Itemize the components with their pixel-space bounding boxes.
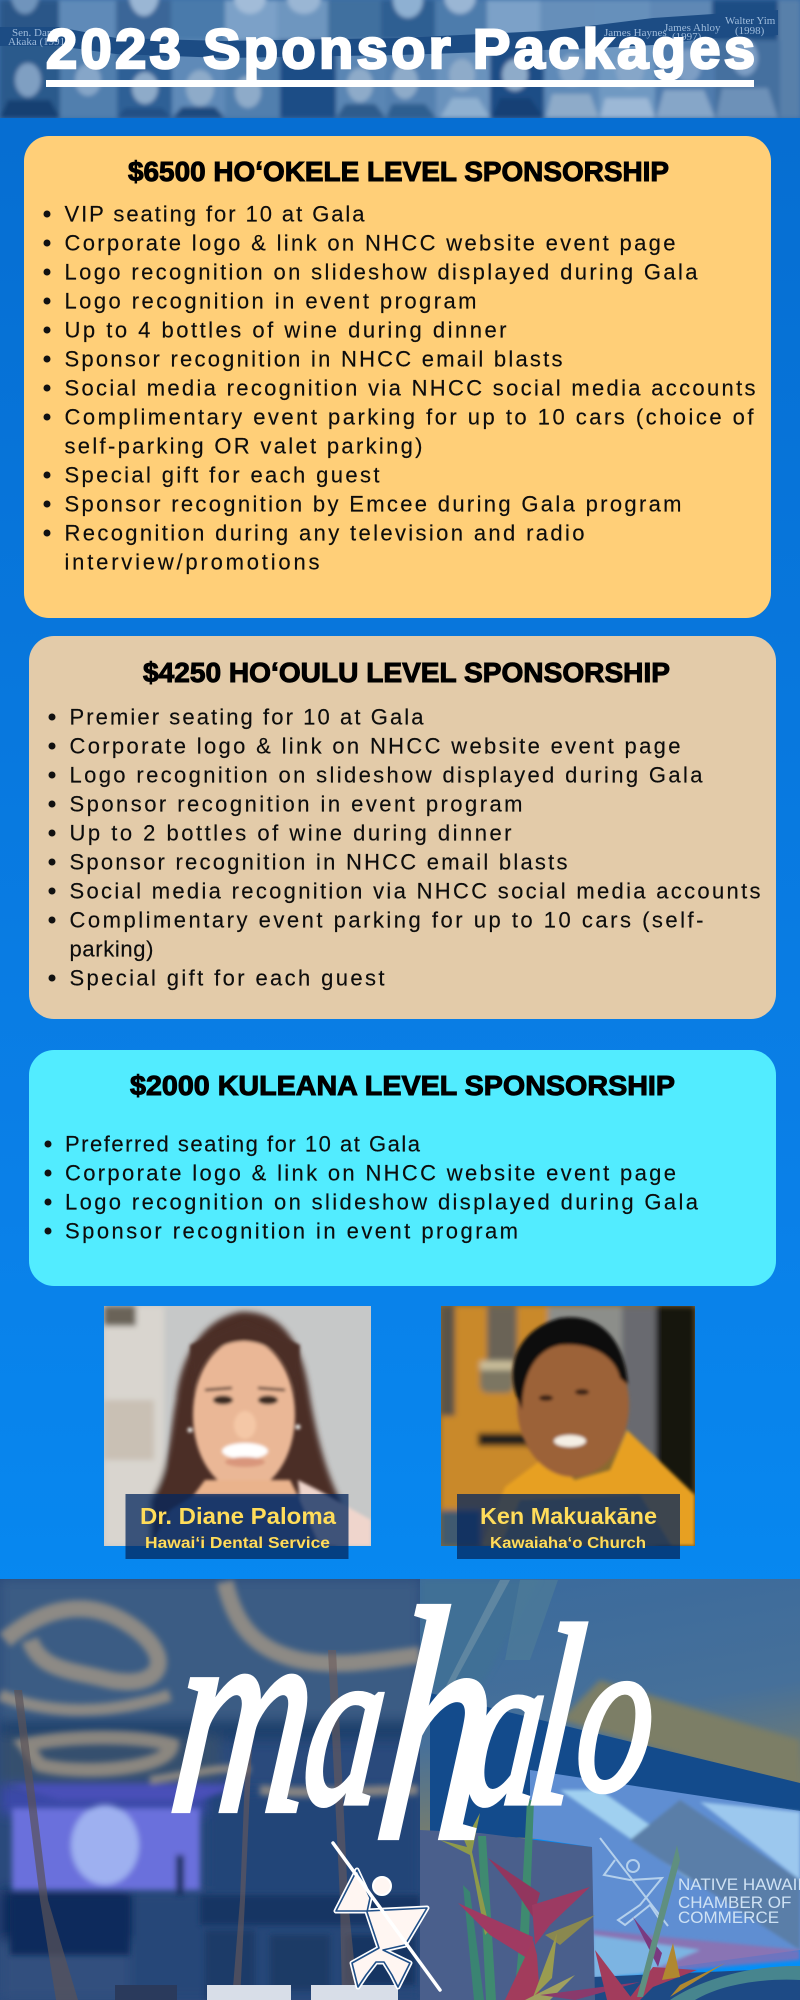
screen logo text: COMMERCE	[678, 1908, 779, 1927]
name plate: Ken Makuakāne: Kawaiahaʻo Church	[490, 1535, 646, 1552]
bullet list: Ho'okele benefits: Sponsor recognition by Emcee during Gala program	[64, 492, 682, 516]
bullet list: Kuleana benefits: Logo recognition on slideshow displayed during Gala	[65, 1190, 699, 1214]
name plate: Ken Makuakāne: Ken Makuakāne	[480, 1503, 657, 1529]
bullet list: Ho'oulu benefits: Logo recognition on slideshow displayed during Gala	[70, 762, 703, 788]
bullet list: Ho'okele benefits: Recognition during any television and radio	[64, 520, 584, 546]
bullet list: Ho'oulu benefits: Special gift for each guest	[70, 966, 385, 990]
bullet list: Ho'oulu benefits: Up to 2 bottles of wine during dinner	[70, 820, 511, 846]
figure outline	[336, 1870, 427, 1987]
heliconia flowers	[440, 1800, 725, 2000]
script word: Mahalo	[156, 1542, 673, 1910]
figure head	[373, 1877, 391, 1895]
bullet list: Ho'okele benefits: Corporate logo & link on NHCC website event page	[64, 230, 676, 256]
script word: Mahalo: h	[364, 1542, 514, 1910]
bullet list: Ho'oulu benefits: Complimentary event parking for up to 10 cars (self-	[70, 908, 704, 932]
bullet list: Ho'okele benefits	[44, 202, 755, 574]
bullet list: Ho'okele benefits: Special gift for each guest	[64, 462, 380, 488]
photo: Ken Makuakāne	[441, 1306, 695, 1546]
screen logo mark	[600, 1838, 668, 1926]
bullet list: Ho'oulu benefits: Premier seating for 10 at Gala	[70, 704, 424, 730]
header banner: portrait wall photo: Akaka (1991)	[8, 36, 69, 48]
bullet list: Ho'okele benefits: interview/promotions	[64, 550, 320, 574]
photo: gala ballroom	[0, 1579, 420, 2000]
heading: Kuleana level: $2000 KULEANA LEVEL SPONSORSHIP	[130, 1070, 675, 1101]
panel: $2000 Kuleana level sponsorship	[29, 1050, 776, 1286]
header banner: portrait wall photo: (1998)	[735, 25, 765, 37]
script word: Mahalo: o	[567, 1589, 668, 1839]
spear	[333, 1843, 440, 1990]
bullet list: Ho'oulu benefits: Social media recognition via NHCC social media accounts	[70, 878, 760, 904]
header banner: portrait wall photo: (1997)	[672, 31, 702, 43]
name plate: Dr. Diane Paloma: Hawaiʻi Dental Service	[145, 1535, 330, 1552]
bullet list: Ho'okele benefits: VIP seating for 10 at Gala	[64, 202, 365, 226]
bullet list: Kuleana benefits	[44, 1132, 699, 1244]
bullet list: Ho'oulu benefits: Sponsor recognition in event program	[70, 792, 522, 816]
photo: Dr. Diane Paloma	[104, 1306, 371, 1546]
bullet list: Ho'oulu benefits: Corporate logo & link on NHCC website event page	[70, 734, 680, 758]
panel: $6500 Ho'okele level sponsorship	[24, 136, 771, 618]
name plate: Ken Makuakāne	[457, 1494, 680, 1559]
bullet list: Ho'okele benefits: Complimentary event parking for up to 10 cars (choice of	[64, 404, 754, 430]
bullet list: Ho'oulu benefits: parking)	[70, 936, 154, 962]
title: 2023 Sponsor Packages: 2023 Sponsor Packages	[46, 17, 755, 80]
heading: Ho'oulu level: $4250 HOʻOULU LEVEL SPONSORSHIP	[143, 657, 670, 688]
script word: Mahalo: a	[294, 1596, 399, 1853]
header banner: portrait wall photo: James Haynes	[604, 27, 667, 39]
bullet list: Kuleana benefits: Preferred seating for 10 at Gala	[65, 1132, 421, 1156]
bullet list: Ho'okele benefits: Up to 4 bottles of wine during dinner	[64, 318, 506, 342]
header banner: portrait wall photo: James Ahloy	[664, 22, 721, 34]
panel: $4250 Ho'oulu level sponsorship	[29, 636, 776, 1019]
screen logo text: CHAMBER OF	[678, 1893, 791, 1912]
bullet list: Kuleana benefits: Corporate logo & link on NHCC website event page	[65, 1160, 676, 1186]
bullet list: Ho'okele benefits: Logo recognition on slideshow displayed during Gala	[64, 260, 698, 284]
bullet list: Kuleana benefits: Sponsor recognition in event program	[65, 1218, 518, 1244]
bullet list: Ho'okele benefits: Logo recognition in event program	[64, 288, 476, 314]
header banner: portrait wall photo: Sen. Daniel	[12, 27, 63, 39]
header banner: portrait wall photo	[0, 0, 800, 118]
photo: conference stage and flowers	[420, 1579, 800, 2000]
bullet list: Ho'oulu benefits: Sponsor recognition in NHCC email blasts	[70, 850, 568, 874]
bullet list: Ho'okele benefits: self-parking OR valet parking)	[64, 434, 422, 458]
script word: Mahalo: a	[456, 1603, 558, 1852]
bullet list: Ho'okele benefits: Sponsor recognition in NHCC email blasts	[64, 346, 562, 372]
name plate: Dr. Diane Paloma: Dr. Diane Paloma	[140, 1503, 336, 1529]
bullet list: Ho'okele benefits: Social media recognition via NHCC social media accounts	[64, 376, 755, 400]
script word: Mahalo: l	[518, 1573, 595, 1859]
figure body	[336, 1870, 427, 1987]
bullet list: Ho'oulu benefits	[48, 704, 760, 990]
name plate: Dr. Diane Paloma	[126, 1494, 348, 1559]
header banner: portrait wall photo: Walter Yim	[725, 15, 776, 27]
script word: Mahalo: m	[160, 1556, 331, 1873]
heading: Ho'okele level: $6500 HOʻOKELE LEVEL SPONSORSHIP	[128, 156, 669, 187]
logo: Native Hawaiian Chamber of Commerce figure with spear	[333, 1843, 440, 1990]
